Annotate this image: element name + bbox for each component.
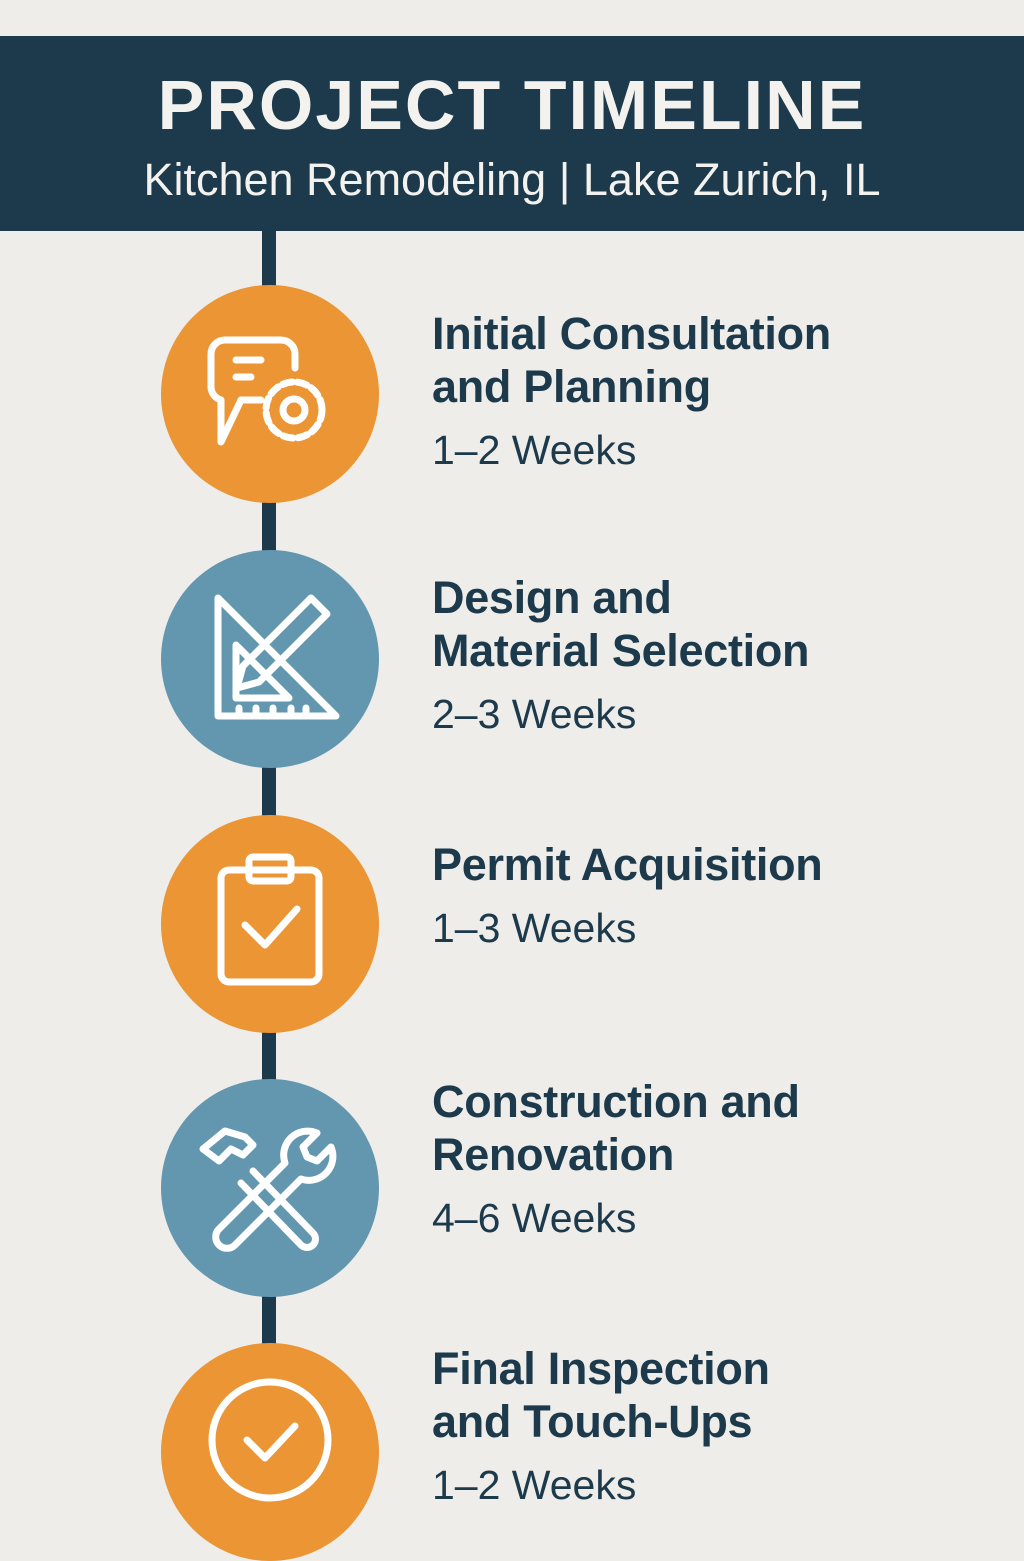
step 3 text: Permit Acquisition	[432, 839, 822, 890]
step 3 text	[432, 839, 822, 951]
step 1 text: and Planning	[432, 361, 711, 412]
subtitle: Kitchen Remodeling | Lake Zurich, IL	[143, 154, 881, 205]
step 4 text: 4–6 Weeks	[432, 1195, 636, 1241]
step 3 text: 1–3 Weeks	[432, 905, 636, 951]
icon: consultation	[161, 285, 379, 503]
step 2 text	[432, 572, 809, 737]
icon: final check	[161, 1343, 379, 1561]
step 4 text: Renovation	[432, 1129, 674, 1180]
step 4 text	[432, 1076, 800, 1241]
icon: design	[161, 550, 379, 768]
step 5 text	[432, 1343, 770, 1508]
step 2 text: Design and	[432, 572, 672, 623]
step 1 text: 1–2 Weeks	[432, 427, 636, 473]
title: PROJECT TIMELINE	[158, 66, 866, 144]
step 5 text: Final Inspection	[432, 1343, 770, 1394]
step 1 text: Initial Consultation	[432, 308, 831, 359]
step 2 text: 2–3 Weeks	[432, 691, 636, 737]
step 5 text: 1–2 Weeks	[432, 1462, 636, 1508]
step 2 text: Material Selection	[432, 625, 809, 676]
header	[0, 36, 1024, 231]
icon: permit	[161, 815, 379, 1033]
icon: construction	[161, 1079, 379, 1297]
step 5 text: and Touch-Ups	[432, 1396, 752, 1447]
step 1 text	[432, 308, 831, 473]
step 4 text: Construction and	[432, 1076, 800, 1127]
